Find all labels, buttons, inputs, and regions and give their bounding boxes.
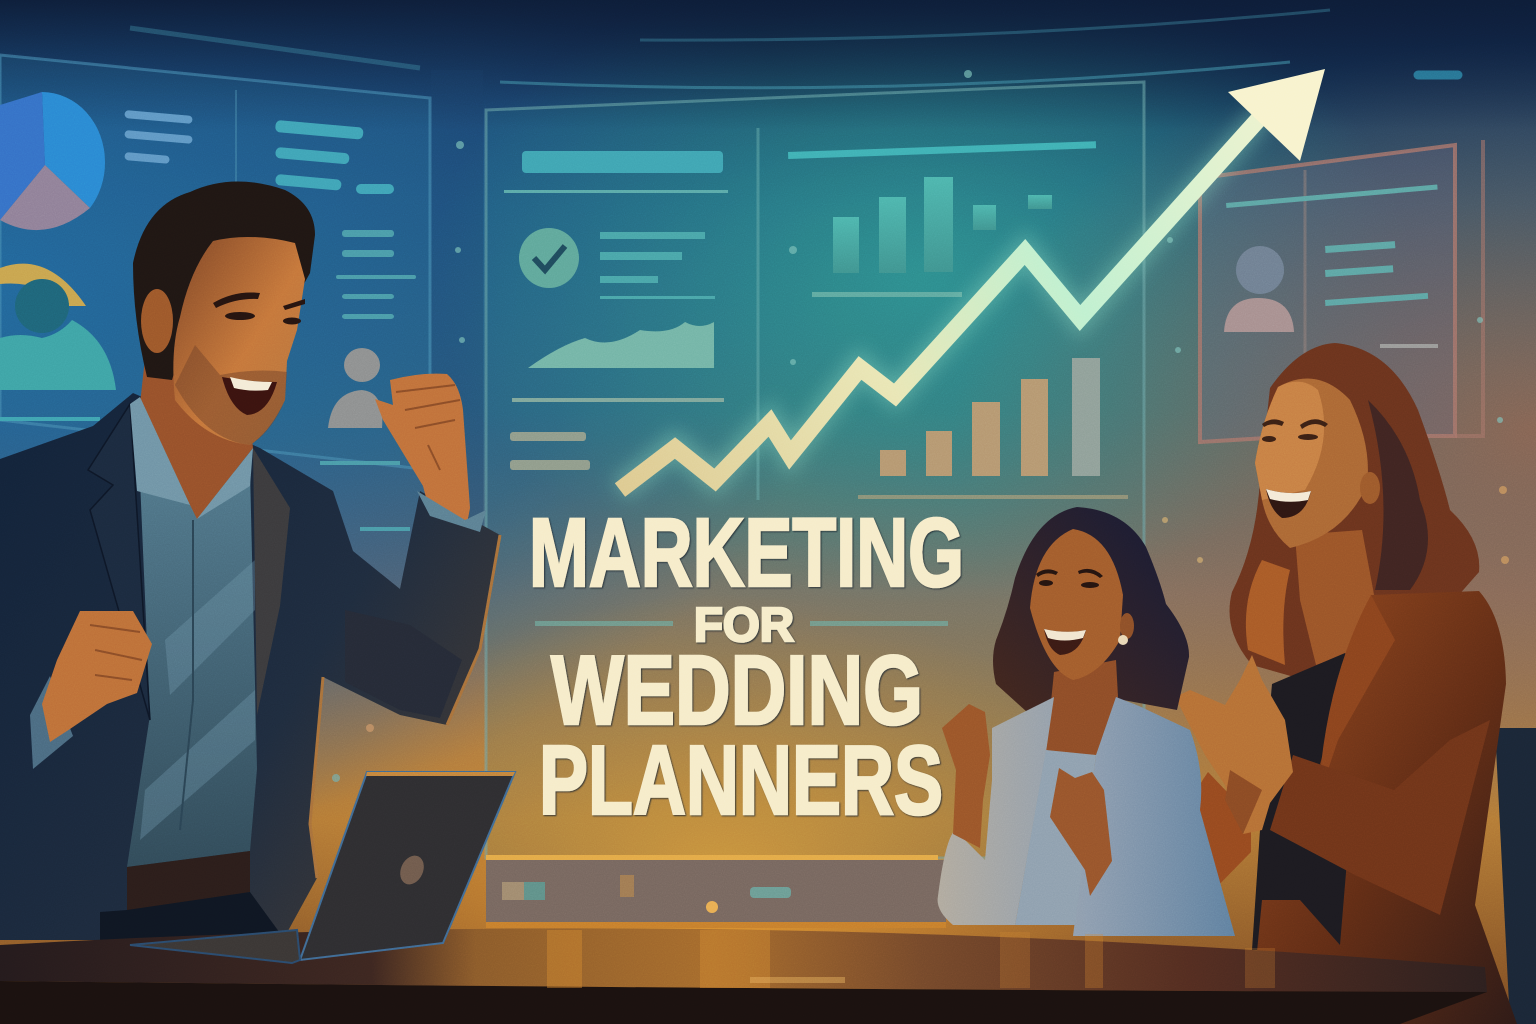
neck [140, 340, 253, 519]
ear [141, 289, 173, 353]
figure: woman in rust blazer [1175, 343, 1517, 1024]
dark curly hair [993, 507, 1189, 712]
chair behind woman [1495, 728, 1536, 1024]
blazer [938, 697, 1235, 936]
figure: woman in pale blazer [938, 507, 1235, 936]
fist finger lines [396, 385, 460, 470]
person icon [328, 348, 382, 428]
raised fist [942, 704, 990, 848]
neck [1046, 660, 1118, 755]
table [0, 928, 1487, 1024]
ear [1120, 613, 1134, 639]
right sleeve [1270, 720, 1490, 915]
warm rim light [310, 535, 500, 878]
lower fist finger lines [90, 625, 142, 680]
hair [133, 181, 315, 380]
eyes and brows [1262, 419, 1328, 442]
neck [1295, 530, 1375, 665]
belt [127, 851, 250, 912]
clapping hands [1175, 655, 1293, 834]
dark top [1252, 653, 1380, 950]
inner top [1015, 750, 1096, 925]
title line: Marketing: MARKETING [529, 498, 964, 607]
smile [1044, 629, 1086, 655]
blazer body [1250, 591, 1517, 1024]
open smile [1266, 489, 1311, 518]
face [1030, 529, 1123, 680]
ear [1360, 472, 1380, 504]
face [173, 237, 305, 445]
table reflections [547, 930, 1275, 988]
sleeve shadow [345, 610, 462, 718]
area chart [528, 322, 714, 368]
data dots [332, 70, 1509, 782]
face [1255, 379, 1368, 548]
growth arrow [620, 69, 1325, 490]
title line: Wedding: WEDDING [551, 635, 923, 745]
laptop [130, 772, 515, 963]
header bar [522, 151, 723, 173]
left sleeve [1181, 772, 1251, 896]
shirt [127, 470, 257, 867]
panel: left dashboard [0, 55, 430, 531]
pie chart [0, 92, 105, 230]
upper bar chart [788, 141, 1096, 297]
cuff [417, 491, 486, 532]
raised fist [375, 374, 470, 524]
title line: for: FOR [694, 599, 794, 652]
lower cuff [30, 676, 73, 769]
title [529, 498, 964, 835]
right lapel [253, 448, 290, 715]
title line: Planners: PLANNERS [539, 725, 943, 835]
figure: celebrating man [0, 181, 500, 940]
shirt folds [140, 560, 255, 840]
profile icon with gauge [0, 264, 116, 390]
open smile [222, 377, 277, 415]
lower fist [42, 611, 152, 742]
panel: right dashboard [1200, 140, 1483, 442]
list lines [0, 110, 416, 531]
left lapel [88, 404, 150, 720]
panel: center dashboard [486, 82, 1144, 858]
text lines [504, 190, 728, 470]
long auburn hair [1230, 343, 1479, 690]
top curved screen lines [130, 10, 1458, 88]
eyes and brows [213, 292, 305, 324]
collar [130, 397, 253, 519]
beard shadow [175, 345, 287, 445]
divider lines [535, 495, 1128, 626]
earring [1118, 635, 1128, 645]
eyes and brows [1036, 569, 1103, 588]
placket [180, 520, 193, 830]
second fist [1050, 768, 1112, 896]
right panel lines [1226, 185, 1438, 348]
person icon [1224, 246, 1294, 332]
trousers [100, 892, 285, 940]
lower wall dashboard strip [486, 855, 946, 928]
lower bar chart [880, 358, 1100, 476]
lapel [1318, 595, 1395, 800]
check badge [519, 228, 579, 288]
jacket body [0, 393, 500, 940]
